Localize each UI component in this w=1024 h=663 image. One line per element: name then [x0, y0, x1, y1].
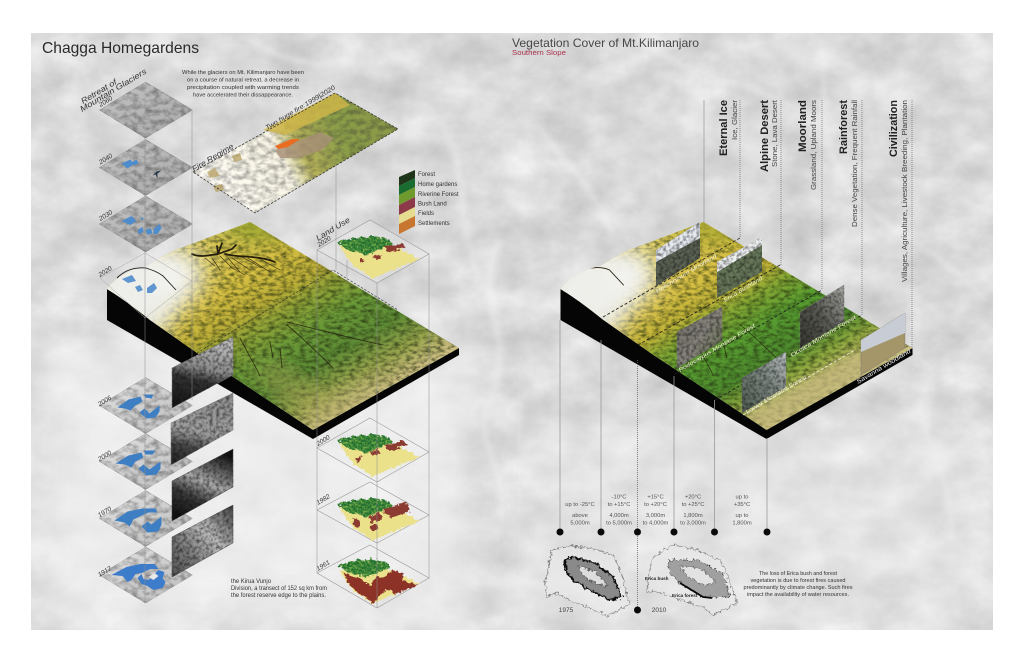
- band: eternal ice: above: [572, 513, 588, 519]
- glacier plate 1970: 1970: [97, 506, 113, 519]
- legend: Forest: Forest: [418, 172, 435, 178]
- zone heading: Eternal Ice: [718, 99, 739, 156]
- glacier intro text: [182, 70, 304, 98]
- photo: Kilimanjaro 1912: [172, 505, 233, 577]
- land use map 1982: 1982: [315, 493, 332, 507]
- legend: Fields: Fields: [418, 211, 434, 217]
- glacier intro text: have accelerated their dissappearance.: [193, 92, 293, 98]
- subtitle: Southern Slope: Southern Slope: [512, 48, 566, 57]
- label: Two huge fire 1999|2020: Two huge fire:1999|2020: [264, 84, 337, 132]
- glacier plate 2030: 2030: [97, 209, 114, 223]
- lower leader lines to elevation dots: [560, 320, 767, 610]
- dashed zone line: [197, 270, 398, 353]
- band: rainforest: +20°C: [685, 494, 701, 500]
- photo: moorland upper zone: [656, 222, 700, 286]
- zone label: Savanna woodland: Savanna woodland: [856, 348, 913, 386]
- band: rainforest: to +25°C: [682, 502, 704, 508]
- glacier plate 1912: 1912: [97, 565, 113, 579]
- photo: Kilimanjaro 2006: [172, 337, 233, 408]
- glacier plate 1970: [97, 490, 192, 546]
- zone heading: Alpine Desert: Alpine Desert: [759, 100, 771, 172]
- erica map 2010: Erica forest: [672, 593, 698, 598]
- zone heading: Eternal Ice: Ice, Glacier: [732, 99, 739, 140]
- title: Chagga Homegardens: Chagga Homegardens: [42, 40, 199, 57]
- photo: podocarpus forest: [677, 307, 722, 368]
- band: alpine desert: 4,000m: [609, 513, 629, 519]
- photo: Kilimanjaro 1970: [172, 449, 233, 521]
- zone label: Lower Montane Forest: Lower Montane Forest: [745, 374, 809, 416]
- band: alpine desert: [606, 494, 632, 526]
- zone label: Ocotea Montane Forest: Ocotea Montane Forest: [790, 315, 858, 359]
- transect caption: the forest reserve edge to the plains.: [231, 593, 326, 599]
- band: civilization: up to: [736, 494, 748, 500]
- band: civilization: up to: [736, 513, 748, 519]
- glacier plate 2030: [97, 196, 192, 252]
- zone heading: Rainforest: [838, 100, 859, 227]
- glacier intro text: While the glaciers on Mt. Kilimanjaro have been: [182, 70, 304, 76]
- forest loss caption: The loss of Erica bush and forest: [759, 571, 837, 577]
- zone heading: Moorland: [797, 99, 818, 190]
- photo: lower montane forest: [742, 352, 786, 413]
- glacier plate 1912: [97, 547, 192, 603]
- band: rainforest: to 3,000m: [680, 520, 706, 526]
- land use map 1982: [315, 482, 429, 543]
- forest loss caption: vegetation is due to forest fires caused: [750, 578, 846, 584]
- band: eternal ice: up to -25°C: [565, 502, 595, 508]
- land use legend: [399, 170, 459, 234]
- zone label: Helichrysum Moorland: Helichrysum Moorland: [655, 253, 719, 295]
- zone heading: Moorland: Moorland: [797, 100, 809, 152]
- band: alpine desert: -10°C: [612, 494, 626, 500]
- legend: Riverine Forest: Riverine Forest: [418, 192, 459, 198]
- glacier intro text: on a course of natural retreat, a decrease in: [187, 78, 299, 84]
- glacier plate 2000: 2000: [96, 450, 113, 464]
- erica map 1975: [545, 546, 630, 617]
- glacier intro text: precipitation coupled with warming trends: [187, 85, 299, 91]
- band: rainforest: 1,800m: [683, 513, 703, 519]
- label: Fire Regime: Fire Regime: [190, 141, 236, 174]
- band: alpine desert: to 5,000m: [606, 520, 632, 526]
- glacier plate 2020 overlay on hill: 2020: [97, 265, 114, 279]
- band: rainforest: [680, 494, 706, 526]
- zone heading: Civilization: Villages, Agriculture, Livestock Breeding, Plantation: [902, 100, 909, 282]
- fire regime map: [193, 93, 398, 213]
- transect caption: Division, a transect of 152 sq km from: [231, 586, 327, 592]
- glacier plate 2000: [96, 434, 192, 490]
- glacier plate 2060: [97, 82, 192, 138]
- photo: erica zone: [717, 237, 762, 298]
- drainage lines: [192, 243, 383, 376]
- savanna divider line: [743, 350, 855, 415]
- legend: Bush Land: Bush Land: [418, 202, 447, 208]
- main block right: vegetation zones: [560, 222, 912, 439]
- label: Land Use: Land Use: [314, 215, 352, 243]
- zone heading: Alpine Desert: Stone, Lava Desert: [772, 100, 779, 167]
- elevation dots: [556, 528, 770, 614]
- band: moorland: to 4,000m: [643, 520, 669, 526]
- forest loss caption: impact the availability of water resources.: [747, 592, 849, 598]
- band: moorland: to +20°C: [644, 502, 667, 508]
- glacier plate 2060: 2060: [97, 95, 114, 109]
- legend: Settlements: Settlements: [418, 221, 450, 227]
- band: civilization: [732, 494, 752, 526]
- photo: savanna: [861, 313, 905, 375]
- glacier plate 2040: [97, 140, 192, 196]
- land use map 1961: 1961: [315, 559, 332, 573]
- erica map 2010: [645, 545, 737, 615]
- temperature and elevation labels: [565, 494, 752, 526]
- band: eternal ice: 5,000m: [570, 520, 590, 526]
- forest loss caption: [744, 571, 853, 598]
- zone label: Podocarpus Montane Forest: Podocarpus Montane Forest: [678, 323, 757, 374]
- block side wall: [107, 289, 459, 439]
- zone heading: Rainforest: Rainforest: [838, 100, 850, 154]
- glacier plate 2040: 2040: [97, 153, 114, 167]
- glacier plate 2006: 2006: [96, 395, 113, 409]
- land use map 2020: [316, 220, 429, 283]
- transect caption: [231, 579, 327, 599]
- zone divider lines: [603, 238, 862, 400]
- zone heading: Civilization: Civilization: [888, 100, 900, 157]
- zone heading: Alpine Desert: [759, 100, 779, 172]
- erica map 1975: 1975: [559, 607, 574, 614]
- land use map 2020: 2020: [316, 235, 333, 249]
- erica map 2010: Erica bush: [645, 576, 669, 581]
- land use map 2000: 2000: [315, 434, 332, 448]
- legend: Home gardens: Home gardens: [418, 182, 457, 188]
- photo: ocotea forest: [800, 285, 844, 348]
- band: moorland: +15°C: [647, 494, 664, 500]
- photo: Kilimanjaro 2000: [171, 393, 233, 465]
- zone label: Erica Bushland: Erica Bushland: [723, 275, 765, 304]
- zone heading: Rainforest: Dense Vegetation, Frequent Rainfall: [852, 100, 859, 227]
- band: civilization: +35°C: [734, 502, 750, 508]
- main block left: land surface: [107, 222, 459, 439]
- heading: Retreat of Mountain Glaciers: Mountain Glaciers: [78, 67, 148, 114]
- glacier plate 2020 overlay on hill: [97, 253, 192, 318]
- transect caption: the Kirua Vunjo: [231, 579, 272, 585]
- erica map 2010: 2010: [652, 607, 667, 614]
- right block photos and zone labels: [655, 222, 913, 416]
- heading: Retreat of Mountain Glaciers: Retreat of: [79, 77, 119, 106]
- band: moorland: 3,000m: [646, 513, 665, 519]
- glacier plate 2006: [96, 378, 192, 434]
- band: alpine desert: to +15°C: [608, 502, 630, 508]
- band: civilization: 1,800m: [732, 520, 752, 526]
- zone heading: Civilization: [888, 100, 909, 282]
- block side wall right: [560, 289, 912, 439]
- zone heading: Moorland: Grassland, Upland Moors: [811, 99, 818, 190]
- land use map 1961: [315, 545, 429, 608]
- vertical zone leader lines: [704, 100, 912, 347]
- band: eternal ice: [565, 502, 595, 526]
- zone heading: Eternal Ice: Eternal Ice: [718, 100, 730, 156]
- forest loss caption: predominantly by climate change. Such fires: [744, 585, 853, 591]
- vertical connector lines left: [145, 110, 429, 608]
- title: Vegetation Cover of Mt.Kilimanjaro: Vegetation Cover of Mt.Kilimanjaro: [512, 36, 699, 50]
- land use map 2000: [315, 418, 429, 482]
- band: moorland: [643, 494, 669, 526]
